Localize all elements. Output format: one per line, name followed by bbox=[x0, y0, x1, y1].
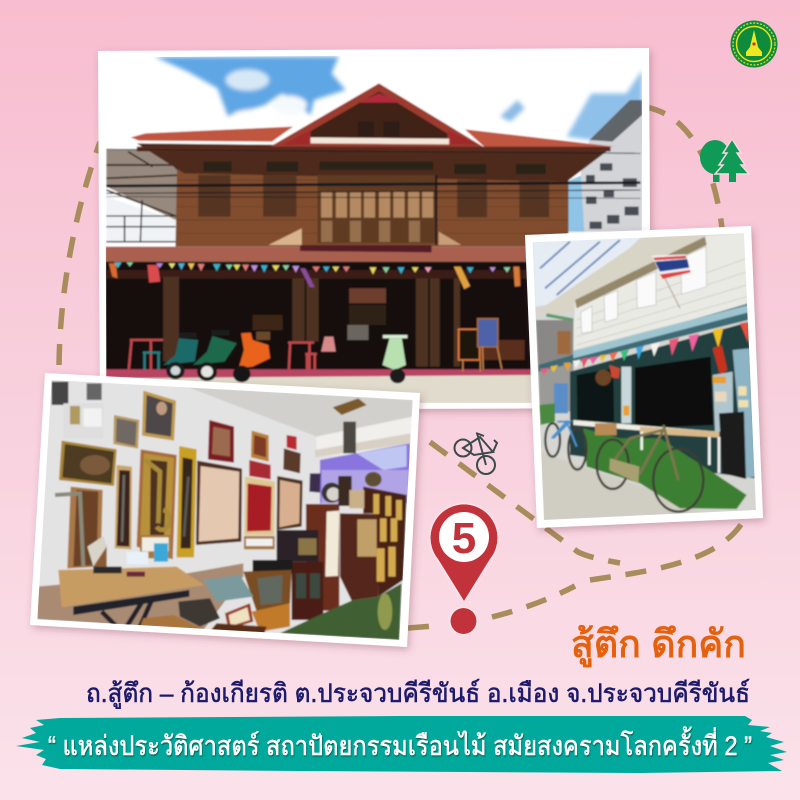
banknote frame bbox=[196, 461, 242, 545]
bikes bbox=[545, 423, 703, 512]
medal frame bbox=[208, 420, 234, 463]
electrical box bbox=[50, 380, 102, 426]
icon: bicycle bbox=[454, 433, 497, 474]
table bbox=[572, 418, 714, 432]
saxophone panels bbox=[67, 487, 103, 568]
signs bbox=[459, 329, 480, 360]
tables bbox=[129, 340, 317, 372]
plants bbox=[539, 403, 555, 425]
icon: trees bbox=[700, 139, 749, 182]
dashed route bbox=[59, 107, 745, 628]
bunting bbox=[740, 322, 749, 342]
portraits bbox=[142, 391, 176, 441]
address: ถ.สู้ตึก – ก้องเกียรติ ต.ประจวบคีรีขันธ์ อ.เมือง จ.ประจวบคีรีขันธ์ bbox=[86, 678, 750, 709]
cabinets bbox=[306, 504, 339, 611]
title: สู้ตึก ดึกคัก bbox=[571, 624, 746, 667]
flag bbox=[652, 254, 691, 308]
quote banner bbox=[16, 716, 787, 773]
chalkboard bbox=[719, 412, 746, 479]
location pin bbox=[430, 504, 498, 634]
table with items bbox=[58, 567, 204, 607]
scooters bbox=[163, 330, 407, 383]
photo: house front bbox=[98, 48, 661, 410]
photo: museum interior bbox=[30, 370, 425, 650]
location pin: 5 bbox=[452, 514, 476, 563]
logo bbox=[730, 20, 778, 68]
photo: bicycles outside shop bbox=[520, 225, 770, 530]
ground bbox=[542, 452, 700, 520]
lantern bbox=[333, 398, 367, 415]
